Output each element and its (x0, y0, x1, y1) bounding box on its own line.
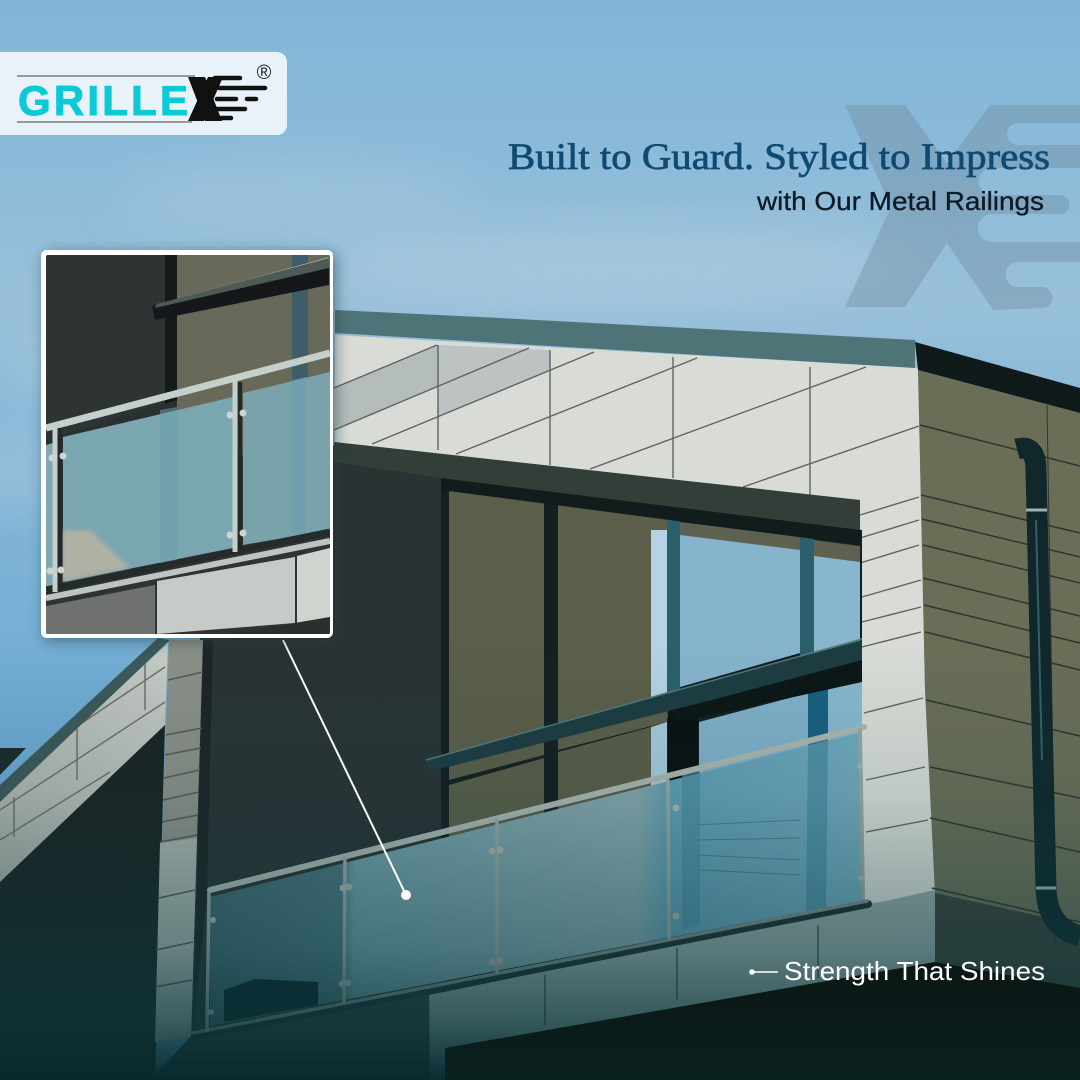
soffit under balcony (445, 962, 1080, 1080)
left wing roof strip (0, 638, 170, 802)
bottom dark gradient overlay (0, 640, 1080, 1080)
watermark X logo (845, 105, 1080, 310)
logo rules (17, 76, 195, 122)
left wing white panels (0, 643, 168, 882)
logo wordmark: GRILLE (18, 77, 188, 124)
caption: Strength That Shines: Strength That Shines (784, 956, 1045, 986)
window panes and frames (441, 478, 862, 1000)
roof fascia (335, 310, 915, 368)
inset lower cladding (46, 548, 330, 634)
inset glass clips (46, 410, 246, 574)
inset glass panels (46, 372, 330, 592)
soffit over window (334, 442, 860, 545)
title: Built to Guard. Styled to Impress (508, 137, 1050, 178)
window transom beam (426, 639, 862, 772)
balcony glass railing (193, 727, 868, 1036)
far left building (0, 748, 26, 775)
inset window panes (165, 255, 330, 455)
white facade (334, 335, 935, 905)
left wing dark wall (0, 725, 165, 1080)
logo plate (0, 52, 287, 135)
registered mark: ® (257, 62, 272, 84)
downpipe (1017, 448, 1080, 936)
central dark wall (190, 430, 445, 1040)
zoom inset: railing close-up (41, 250, 333, 638)
logo X mark (188, 77, 265, 121)
glass clips (208, 763, 864, 1015)
callout pointer line (283, 640, 411, 900)
left pier (155, 640, 203, 1042)
olive right wall (915, 342, 1080, 1000)
inset rails and posts (46, 353, 330, 598)
lower band below balcony (150, 890, 935, 1080)
building photo (0, 310, 1080, 1080)
subtitle: with Our Metal Railings (756, 186, 1044, 216)
inset window beam (152, 258, 329, 320)
rails and posts (193, 727, 868, 1036)
